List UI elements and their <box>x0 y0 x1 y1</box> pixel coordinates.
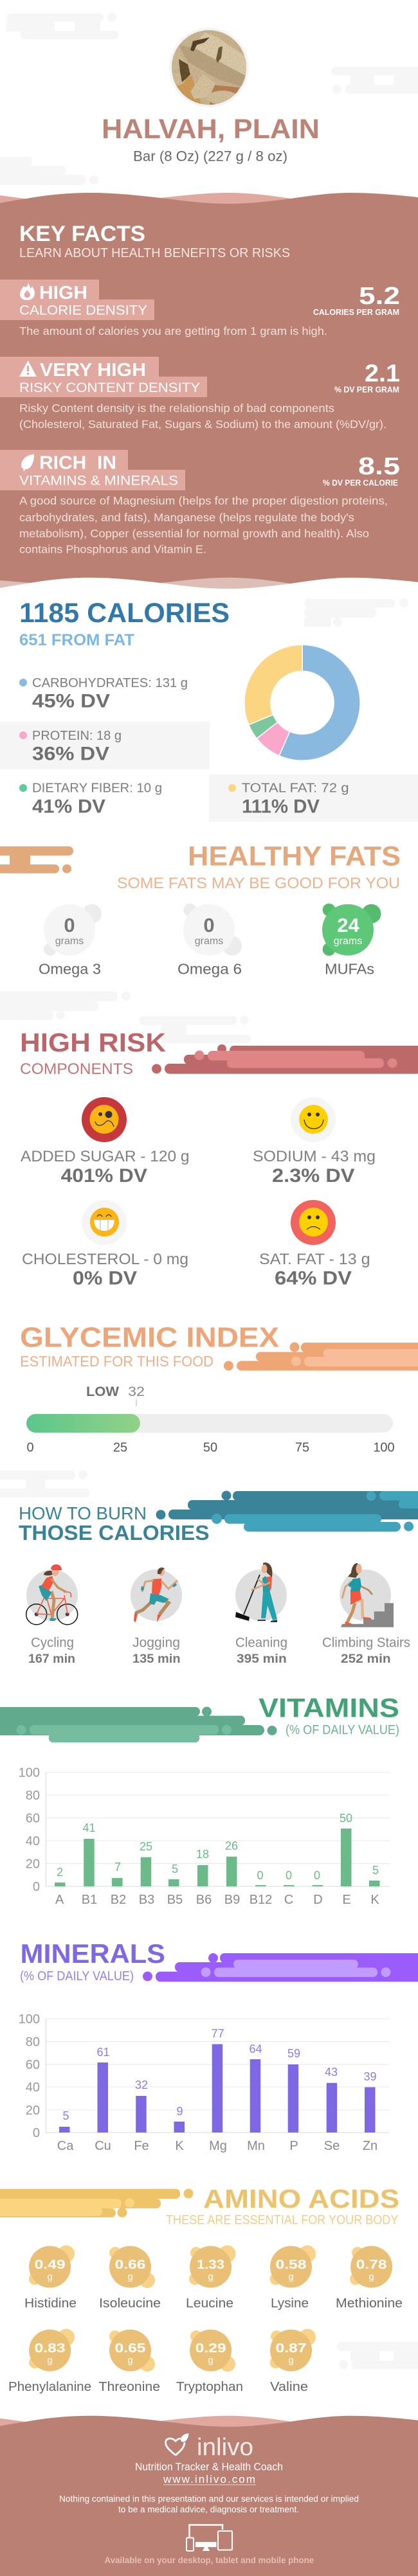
risk: added sugar: ADDED SUGAR - 120 g <box>21 1148 189 1165</box>
bar chart: minerals: K <box>175 2139 184 2153</box>
icon: flame <box>20 283 35 300</box>
icon: devices <box>186 2525 232 2551</box>
amino acids subheading: THESE ARE ESSENTIAL FOR YOUR BODY <box>166 2213 399 2227</box>
amino: histidine: g <box>47 2271 53 2282</box>
amino: leucine: 1.33 <box>197 2258 224 2272</box>
bar chart: vitamins: 5 <box>172 1863 178 1875</box>
risk: saturated fat <box>259 1200 370 1289</box>
bar chart: minerals: 32 <box>135 2079 148 2091</box>
amino: leucine: Leucine <box>186 2296 233 2311</box>
bar chart: minerals <box>19 2012 390 2153</box>
risk: cholesterol <box>22 1200 188 1289</box>
icon: leaf <box>21 454 34 471</box>
glycemic gauge <box>26 1414 395 1455</box>
legend: protein: PROTEIN: 18 g <box>32 729 122 743</box>
activity: jogging: Jogging <box>132 1636 180 1650</box>
fact: rich in vitamins and minerals: metabolism), Copper (essential for normal growth and health). Also <box>19 527 369 540</box>
fact: rich in vitamins and minerals <box>0 450 400 555</box>
bar chart: vitamins: 20 <box>26 1857 40 1872</box>
amino: valine: g <box>288 2355 294 2366</box>
legend: carbohydrates: CARBOHYDRATES: 131 g <box>32 676 188 690</box>
badge: omega 6: 0 <box>203 914 215 936</box>
amino: isoleucine: 0.66 <box>114 2258 145 2272</box>
logo: inlivo: inlivo <box>197 2434 253 2461</box>
bar chart: minerals: 0 <box>33 2126 40 2140</box>
amino: leucine <box>186 2246 235 2311</box>
badge: mufas: MUFAs <box>325 961 374 978</box>
panel: how to burn those calories <box>19 1491 418 1666</box>
bar chart: vitamins: B9 <box>224 1893 240 1907</box>
fact: risky content density: 2.1 <box>365 360 400 387</box>
bar chart: minerals: 39 <box>363 2070 377 2083</box>
glycemic gauge: 50 <box>203 1441 217 1455</box>
fact: calorie density: HIGH <box>39 283 87 303</box>
bar chart: minerals: 61 <box>96 2046 110 2059</box>
fact: risky content density: VERY HIGH <box>40 360 146 380</box>
amino: isoleucine: g <box>127 2271 133 2282</box>
amino: tryptophan: g <box>208 2355 214 2366</box>
key facts heading: KEY FACTS <box>19 222 145 246</box>
logo: inlivo <box>165 2433 253 2461</box>
bar chart: vitamins: B1 <box>82 1893 97 1907</box>
disclaimer <box>59 2494 359 2514</box>
bar chart: minerals: 100 <box>19 2012 40 2026</box>
bar chart: vitamins: 100 <box>19 1766 40 1780</box>
bar chart: vitamins: B5 <box>167 1893 183 1907</box>
activity: cleaning <box>235 1562 287 1666</box>
panel: amino acids <box>0 2184 403 2394</box>
fact: calorie density: 5.2 <box>359 283 400 310</box>
bar chart: minerals: Cu <box>95 2139 111 2153</box>
fact: rich in vitamins and minerals: % DV PER CALORIE <box>323 478 398 487</box>
fact: rich in vitamins and minerals: 8.5 <box>358 453 400 480</box>
amino: methionine <box>336 2246 403 2311</box>
badge: omega 6: grams <box>195 936 223 947</box>
badge: omega 3: 0 <box>64 914 75 936</box>
glycemic value: 32 <box>128 1384 145 1399</box>
badge: mufas: 24 <box>337 914 359 936</box>
bar chart: minerals: 40 <box>26 2080 40 2095</box>
badge: omega 3 <box>39 904 102 978</box>
vitamins heading: VITAMINS <box>259 1692 399 1722</box>
amino: methionine: g <box>368 2271 374 2282</box>
minerals heading: MINERALS <box>21 1938 165 1969</box>
bar chart: minerals: 9 <box>176 2105 183 2118</box>
bar chart: minerals: Ca <box>57 2139 74 2153</box>
panel: vitamins <box>0 1692 399 1907</box>
amino: valine: Valine <box>270 2380 308 2394</box>
activity: jogging: 135 min <box>132 1652 181 1666</box>
glycemic gauge: 75 <box>295 1441 309 1455</box>
risk: cholesterol: 0% DV <box>73 1268 137 1289</box>
legend: dietary fiber: DIETARY FIBER: 10 g <box>32 782 162 796</box>
amino: lysine: Lysine <box>271 2296 309 2311</box>
fact: calorie density <box>0 280 400 337</box>
amino: lysine: g <box>288 2271 294 2282</box>
risk: added sugar <box>21 1097 189 1186</box>
banner shape <box>0 2189 193 2217</box>
amino: phenylalanine: g <box>47 2355 53 2366</box>
website link: www.inlivo.com <box>163 2473 255 2485</box>
bar chart: vitamins: 41 <box>82 1821 96 1834</box>
badge: omega 6: Omega 6 <box>177 961 242 978</box>
bar chart: vitamins: 18 <box>196 1848 209 1861</box>
bar chart: minerals: 64 <box>249 2043 262 2055</box>
bar chart: vitamins: 0 <box>286 1869 292 1882</box>
fact: rich in vitamins and minerals: carbohydrates, and fats), Manganese (helps regulate the body's <box>19 511 354 524</box>
bar chart: vitamins: 26 <box>225 1839 238 1852</box>
bar chart: minerals: P <box>289 2139 298 2153</box>
bar chart: minerals: 20 <box>26 2104 40 2118</box>
glycemic subheading: ESTIMATED FOR THIS FOOD <box>20 1353 214 1370</box>
panel: key facts <box>0 193 418 595</box>
badge: mufas: grams <box>334 936 362 947</box>
glycemic value: LOW <box>86 1384 119 1399</box>
bar chart: vitamins: B3 <box>139 1893 154 1907</box>
risk: saturated fat: SAT. FAT - 13 g <box>259 1251 370 1268</box>
panel: glycemic index <box>20 1321 418 1455</box>
bar chart: vitamins: 50 <box>340 1812 352 1825</box>
bar chart: minerals: 60 <box>26 2058 40 2072</box>
amino: valine: 0.87 <box>275 2341 306 2356</box>
bar chart: vitamins: 40 <box>26 1834 40 1848</box>
disclaimer: to be a medical advice, diagnosis or treatment. <box>118 2504 299 2514</box>
banner shape <box>224 1342 418 1370</box>
fact: rich in vitamins and minerals: VITAMINS & MINERALS <box>19 473 178 488</box>
activity: cycling: Cycling <box>31 1636 74 1650</box>
glycemic heading: GLYCEMIC INDEX <box>20 1321 279 1353</box>
title: HALVAH, PLAIN <box>102 114 320 145</box>
banner shape <box>143 1953 418 1981</box>
bar chart: vitamins: 7 <box>114 1861 121 1874</box>
legend: total fat: TOTAL FAT: 72 g <box>242 782 349 796</box>
high risk subheading: COMPONENTS <box>20 1060 133 1078</box>
calories from fat: 651 FROM FAT <box>19 631 134 649</box>
key facts subheading: LEARN ABOUT HEALTH BENEFITS OR RISKS <box>19 246 290 260</box>
bar chart: minerals: 77 <box>212 2027 224 2040</box>
banner shape <box>0 1707 277 1742</box>
bar chart: vitamins: 60 <box>26 1812 40 1826</box>
amino: threonine <box>99 2329 160 2394</box>
availability note: Available on your desktop, tablet and mobile phone <box>104 2555 314 2565</box>
healthy fats subheading: SOME FATS MAY BE GOOD FOR YOU <box>117 875 400 892</box>
bar chart: vitamins: 25 <box>140 1840 152 1853</box>
amino: phenylalanine <box>8 2329 91 2394</box>
amino: phenylalanine: 0.83 <box>35 2341 66 2356</box>
burn heading bold: THOSE CALORIES <box>19 1521 210 1544</box>
high risk heading: HIGH RISK <box>20 1028 166 1057</box>
badge: omega 3: Omega 3 <box>39 961 101 978</box>
panel: footer <box>0 2416 418 2576</box>
amino: methionine: Methionine <box>336 2296 403 2311</box>
amino acids heading: AMINO ACIDS <box>203 2184 399 2214</box>
fact: risky content density: RISKY CONTENT DENSITY <box>19 380 200 395</box>
donut chart <box>244 645 360 760</box>
legend: carbohydrates: 45% DV <box>32 691 110 712</box>
activity: climbing stairs <box>322 1563 410 1666</box>
activity: cycling: 167 min <box>28 1652 75 1666</box>
legend: protein <box>0 722 210 769</box>
amino: tryptophan: Tryptophan <box>176 2380 243 2394</box>
bar chart: minerals: 80 <box>26 2035 40 2049</box>
amino: isoleucine: Isoleucine <box>99 2296 161 2311</box>
amino: tryptophan: 0.29 <box>195 2341 226 2356</box>
legend: dietary fiber <box>19 782 162 818</box>
amino: valine <box>270 2329 316 2394</box>
fact: calorie density: CALORIE DENSITY <box>19 302 147 318</box>
amino: lysine <box>270 2246 316 2311</box>
activity: climbing stairs: Climbing Stairs <box>322 1636 410 1650</box>
fact: rich in vitamins and minerals: contains Phosphorus and Vitamin E. <box>19 542 206 555</box>
badge: mufas <box>322 904 381 978</box>
badge: omega 6 <box>177 904 242 978</box>
bar chart: vitamins: 5 <box>372 1864 379 1877</box>
bar chart: minerals: 5 <box>62 2109 69 2122</box>
bar chart: vitamins: 2 <box>57 1866 63 1879</box>
amino: tryptophan <box>176 2329 243 2394</box>
amino: threonine: g <box>127 2355 133 2366</box>
bar chart: vitamins: E <box>342 1893 351 1907</box>
amino: phenylalanine: Phenylalanine <box>8 2380 91 2394</box>
panel: minerals <box>19 1938 418 2153</box>
risk: saturated fat: 64% DV <box>275 1268 352 1289</box>
bar chart: vitamins: B6 <box>196 1893 212 1907</box>
bar chart: vitamins: 80 <box>26 1789 40 1803</box>
healthy fats heading: HEALTHY FATS <box>188 841 401 872</box>
risk: sodium: SODIUM - 43 mg <box>253 1148 376 1165</box>
tagline: Nutrition Tracker & Health Coach <box>135 2460 283 2473</box>
amino: lysine: 0.58 <box>275 2258 306 2272</box>
bar chart: minerals: 59 <box>287 2047 300 2060</box>
bar chart: vitamins: 0 <box>314 1869 320 1882</box>
fact: risky content density: (Cholesterol, Saturated Fat, Sugars & Sodium) to the amount (%DV/gr). <box>19 418 386 431</box>
activity: climbing stairs: 252 min <box>341 1652 391 1666</box>
fact: risky content density: Risky Content density is the relationship of bad components <box>19 402 334 415</box>
glycemic gauge: 100 <box>373 1441 395 1455</box>
banner shape <box>0 846 73 873</box>
amino: histidine <box>24 2246 77 2311</box>
fact: calorie density: CALORIES PER GRAM <box>313 307 399 317</box>
bar chart: vitamins: 0 <box>33 1880 40 1894</box>
bar chart: vitamins: A <box>55 1893 64 1907</box>
burn heading light: HOW TO BURN <box>19 1503 147 1523</box>
fact: calorie density: The amount of calories you are getting from 1 gram is high. <box>19 325 327 337</box>
activity: jogging <box>131 1567 182 1666</box>
amino: histidine: 0.49 <box>35 2258 66 2272</box>
glycemic value <box>86 1384 145 1406</box>
amino: isoleucine <box>99 2246 161 2311</box>
minerals subheading: (% OF DAILY VALUE) <box>20 1969 134 1983</box>
risk: sodium <box>253 1097 376 1186</box>
panel: high risk <box>20 1028 418 1289</box>
legend: carbohydrates <box>19 676 188 712</box>
legend: total fat <box>209 774 418 822</box>
bar chart: vitamins: D <box>313 1893 323 1907</box>
bar chart: vitamins <box>19 1766 390 1907</box>
bar chart: minerals: Mn <box>247 2139 265 2153</box>
legend: dietary fiber: 41% DV <box>32 796 105 818</box>
banner shape <box>152 1044 418 1074</box>
glycemic gauge: 0 <box>26 1441 34 1455</box>
legend: protein: 36% DV <box>32 744 109 765</box>
amino: threonine: 0.65 <box>114 2341 145 2356</box>
food photo <box>167 28 252 109</box>
banner shape <box>156 1491 418 1532</box>
bar chart: vitamins: C <box>284 1893 293 1907</box>
risk: added sugar: 401% DV <box>61 1165 147 1186</box>
bar chart: minerals: Zn <box>363 2139 377 2153</box>
fact: risky content density <box>0 357 400 431</box>
bar chart: minerals: Fe <box>134 2139 149 2153</box>
fact: rich in vitamins and minerals: RICH IN <box>39 452 116 473</box>
bar chart: vitamins: 0 <box>257 1869 264 1882</box>
fact: risky content density: % DV PER GRAM <box>334 384 399 395</box>
bar chart: minerals: Mg <box>209 2139 227 2153</box>
icon: warning <box>19 361 37 377</box>
bar chart: vitamins: B2 <box>111 1893 126 1907</box>
panel: healthy fats <box>0 841 401 978</box>
bar chart: minerals: Se <box>324 2139 340 2153</box>
activity: cycling <box>26 1564 78 1666</box>
fact: rich in vitamins and minerals: A good source of Magnesium (helps for the proper digestion proteins, <box>19 494 388 507</box>
glycemic gauge: 25 <box>113 1441 127 1455</box>
bar chart: vitamins: B12 <box>250 1893 272 1907</box>
disclaimer: Nothing contained in this presentation and our services is intended or implied <box>59 2494 359 2504</box>
serving size: Bar (8 Oz) (227 g / 8 oz) <box>133 148 287 165</box>
risk: sodium: 2.3% DV <box>272 1165 355 1186</box>
legend: total fat: 111% DV <box>242 796 320 818</box>
amino: methionine: 0.78 <box>356 2258 387 2272</box>
risk: cholesterol: CHOLESTEROL - 0 mg <box>22 1251 188 1268</box>
amino: leucine: g <box>208 2271 214 2282</box>
badge: omega 3: grams <box>55 936 84 947</box>
amino: histidine: Histidine <box>24 2296 77 2311</box>
amino: threonine: Threonine <box>99 2380 160 2394</box>
activity: cleaning: Cleaning <box>235 1636 287 1650</box>
calories heading: 1185 CALORIES <box>19 598 230 629</box>
bar chart: vitamins: K <box>370 1893 379 1907</box>
panel: calories <box>0 598 418 822</box>
bar chart: minerals: 43 <box>325 2066 338 2079</box>
activity: cleaning: 395 min <box>237 1652 287 1666</box>
vitamins subheading: (% OF DAILY VALUE) <box>286 1723 399 1737</box>
